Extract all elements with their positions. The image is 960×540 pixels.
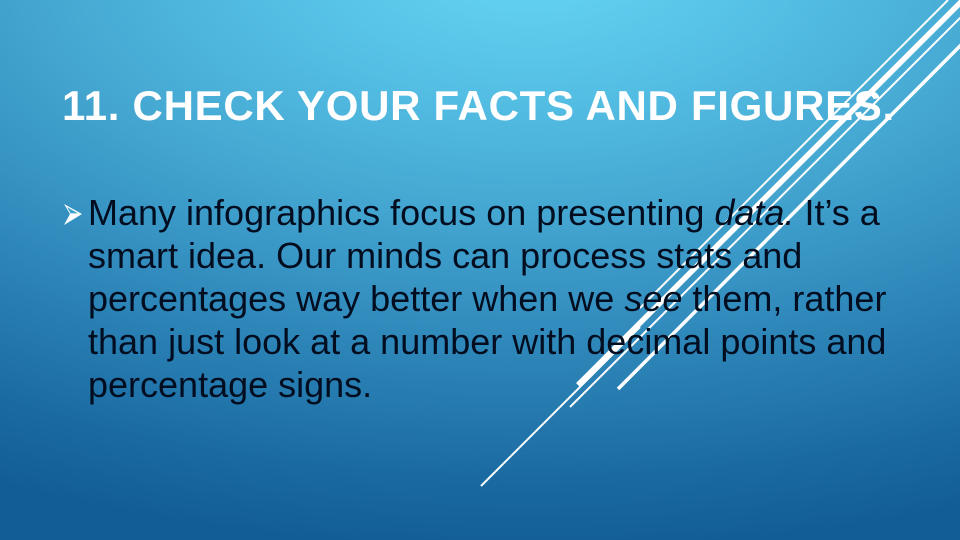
text: percentages way better when we see them, rather — [88, 278, 886, 319]
text: percentage signs. — [88, 364, 372, 405]
text: Many infographics focus on presenting data. It’s a — [88, 192, 880, 233]
icon: bullet arrow — [64, 204, 82, 225]
text: smart idea. Our minds can process stats and — [88, 235, 802, 276]
body text — [88, 192, 886, 405]
title: 11. CHECK YOUR FACTS AND FIGURES. — [62, 82, 895, 129]
text: than just look at a number with decimal points and — [88, 321, 886, 362]
